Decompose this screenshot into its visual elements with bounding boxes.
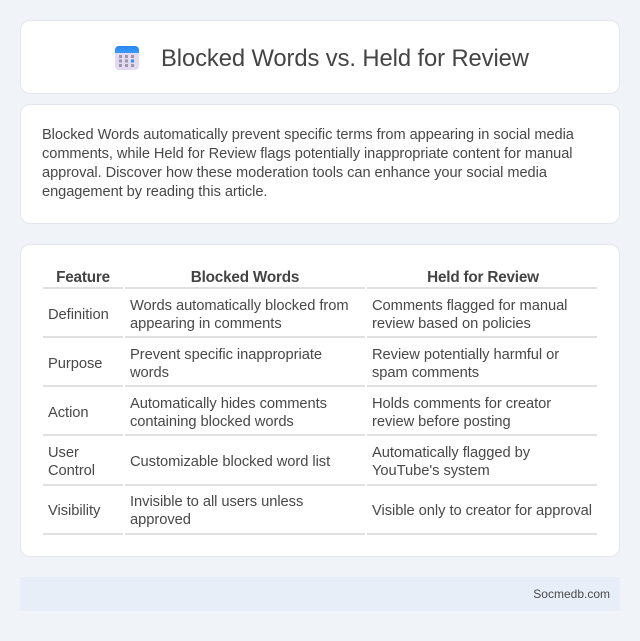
row: Definition [48, 298, 567, 332]
row: Purpose: words [130, 365, 169, 381]
row: Visibility: Visible only to creator for approval [372, 503, 592, 519]
panel: title [20, 20, 620, 94]
table header [56, 269, 539, 286]
row: Definition: Comments flagged for manual [372, 298, 567, 314]
intro text: approval. Discover how these moderation tools can enhance your social media [42, 165, 547, 181]
row: Purpose: Purpose [48, 356, 102, 372]
intro text [42, 127, 574, 200]
row: Purpose: Review potentially harmful or [372, 347, 559, 363]
table header: Blocked Words [191, 269, 299, 286]
icon: calendar [115, 46, 139, 70]
row: Action: containing blocked words [130, 414, 294, 430]
row: User Control: Automatically flagged by [372, 445, 530, 461]
row: User Control: YouTube's system [372, 463, 490, 479]
row: Purpose: spam comments [372, 365, 479, 381]
row: Action: Automatically hides comments [130, 396, 327, 412]
footer source text: Socmedb.com [533, 587, 610, 601]
row: User Control: User [48, 445, 79, 461]
heading: Blocked Words vs. Held for Review [161, 45, 529, 72]
row: Action: Action [48, 405, 89, 421]
row: Visibility: Invisible to all users unless [130, 494, 303, 510]
row: Purpose: Prevent specific inappropriate [130, 347, 322, 363]
row: Action: review before posting [372, 414, 511, 430]
row: User Control: Customizable blocked word list [130, 454, 330, 470]
row: User Control: Control [48, 463, 95, 479]
row: Action [48, 396, 551, 430]
panel: introduction [20, 104, 620, 224]
row: Visibility: approved [130, 512, 191, 528]
row: Action: Holds comments for creator [372, 396, 551, 412]
row: Visibility: Visibility [48, 503, 100, 519]
row: Definition: review based on policies [372, 316, 531, 332]
row: Purpose [48, 347, 559, 381]
row: Visibility [48, 494, 592, 528]
row: User Control [48, 445, 530, 479]
intro text: Blocked Words automatically prevent specific terms from appearing in social media [42, 127, 574, 143]
intro text: comments, while Held for Review flags potentially inappropriate content for manual [42, 146, 572, 162]
table header: Feature [56, 269, 110, 286]
intro text: engagement by reading this article. [42, 184, 267, 200]
row: Definition: Words automatically blocked from [130, 298, 349, 314]
table header: Held for Review [427, 269, 539, 286]
panel: comparison table [20, 244, 620, 557]
row: Definition: Definition [48, 307, 109, 323]
footer [20, 577, 620, 611]
row: Definition: appearing in comments [130, 316, 282, 332]
